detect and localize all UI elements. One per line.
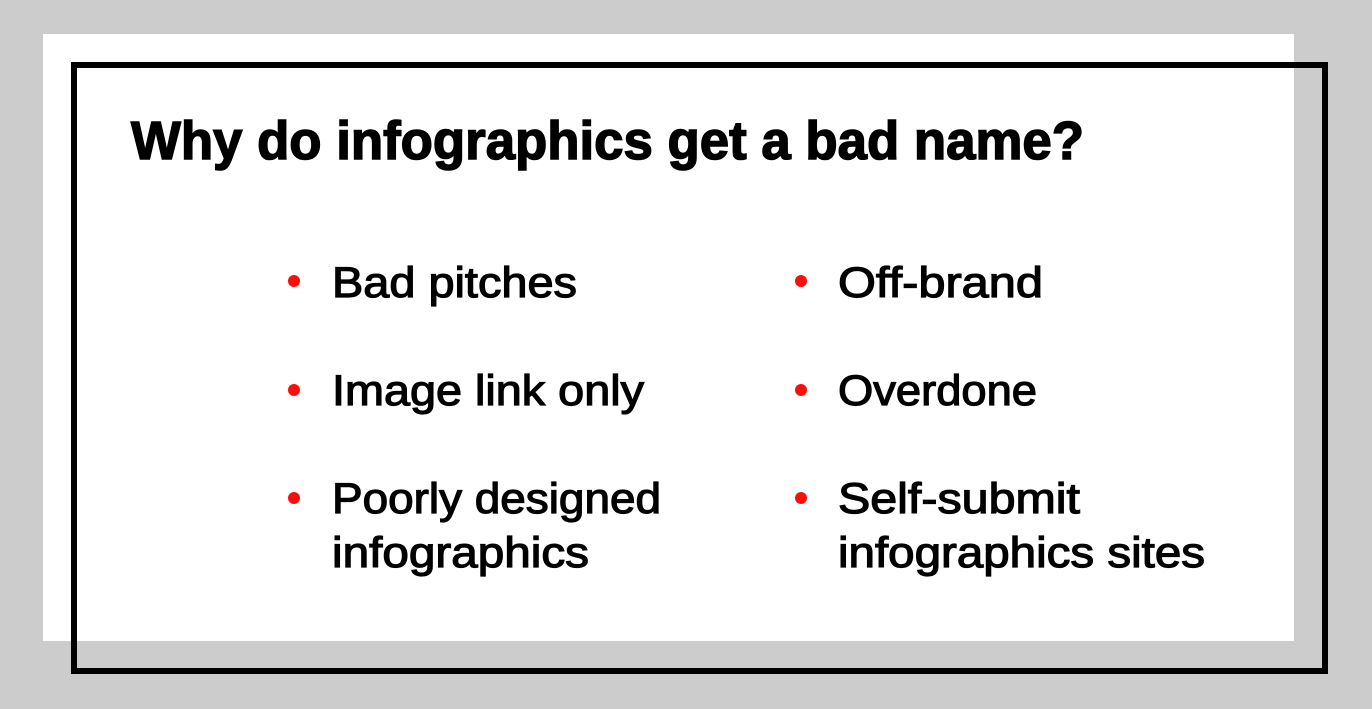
- list item: Bad pitches: Bad pitches: [332, 260, 577, 307]
- list item: Poorly designed infographics: [288, 476, 661, 577]
- list item: Self-submit infographics sites: infographics sites: [838, 530, 1205, 577]
- left column list: [288, 260, 661, 577]
- list item: Overdone: Overdone: [838, 368, 1037, 415]
- list item: Poorly designed infographics: infographics: [332, 530, 589, 577]
- offset black frame: [74, 65, 1325, 671]
- list item: Self-submit infographics sites: [795, 476, 1205, 577]
- list item: Off-brand: Off-brand: [838, 260, 1043, 307]
- title: Why do infographics get a bad name?: [131, 111, 1084, 171]
- list item: Self-submit infographics sites: Self-submit: [838, 476, 1080, 523]
- list item: Poorly designed infographics: Poorly designed: [332, 476, 661, 523]
- right column list: [795, 260, 1205, 577]
- white panel: [43, 34, 1294, 641]
- list item: Image link only: Image link only: [332, 368, 645, 415]
